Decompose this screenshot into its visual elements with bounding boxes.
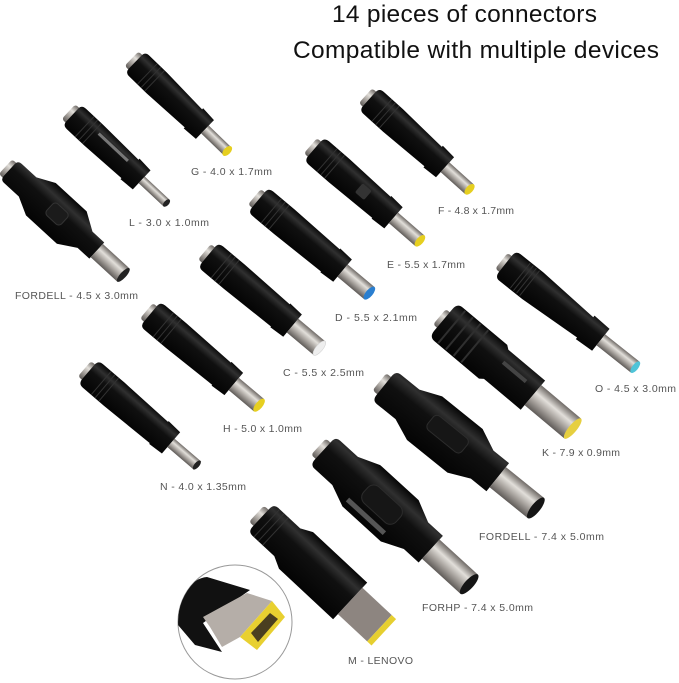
label M: M - LENOVO bbox=[348, 655, 413, 667]
connector M Lenovo bbox=[239, 495, 413, 667]
title line 1: 14 pieces of connectors bbox=[332, 1, 597, 28]
label FORHP: FORHP - 7.4 x 5.0mm bbox=[422, 602, 533, 614]
label O: O - 4.5 x 3.0mm bbox=[595, 383, 676, 395]
inset metal plug bbox=[203, 593, 272, 647]
connector D bbox=[244, 184, 417, 324]
connector N bbox=[74, 357, 246, 493]
label C: C - 5.5 x 2.5mm bbox=[283, 367, 364, 379]
title line 2: Compatible with multiple devices bbox=[293, 37, 659, 64]
label FORDELL 7.4: FORDELL - 7.4 x 5.0mm bbox=[479, 531, 604, 543]
connector H bbox=[136, 298, 302, 435]
plug H bbox=[136, 298, 272, 420]
connector FORHP bbox=[300, 426, 533, 614]
label G: G - 4.0 x 1.7mm bbox=[191, 166, 272, 178]
plug E bbox=[300, 134, 433, 255]
connector C bbox=[194, 239, 364, 379]
plug N bbox=[74, 357, 209, 478]
connector FORDELL 7.4 bbox=[362, 360, 604, 543]
label K: K - 7.9 x 0.9mm bbox=[542, 447, 620, 459]
connector FORDELL 4.5 bbox=[0, 150, 140, 302]
inset black body bbox=[178, 577, 250, 652]
plug K bbox=[425, 300, 590, 448]
label E: E - 5.5 x 1.7mm bbox=[387, 259, 465, 271]
label D: D - 5.5 x 2.1mm bbox=[335, 312, 417, 324]
plug FORDELL 7.4 bbox=[362, 360, 557, 533]
inset yellow tip bbox=[240, 601, 285, 650]
inset tip hole bbox=[251, 613, 278, 642]
label FORDELL 4.5: FORDELL - 4.5 x 3.0mm bbox=[15, 290, 138, 302]
connector E bbox=[300, 134, 465, 271]
label H: H - 5.0 x 1.0mm bbox=[223, 423, 302, 435]
connector O bbox=[491, 247, 676, 395]
plug G bbox=[121, 48, 240, 164]
plug FORDELL 4.5 bbox=[0, 150, 140, 293]
plug M bbox=[239, 495, 401, 651]
plug F bbox=[355, 85, 482, 203]
connector L bbox=[59, 101, 209, 229]
connector F bbox=[355, 85, 514, 217]
plug FORHP bbox=[300, 426, 491, 608]
plug L bbox=[59, 101, 178, 215]
connector G bbox=[121, 48, 272, 178]
plug O bbox=[491, 247, 648, 382]
connector K bbox=[425, 300, 620, 459]
label L: L - 3.0 x 1.0mm bbox=[129, 217, 209, 229]
label N: N - 4.0 x 1.35mm bbox=[160, 481, 246, 493]
inset: close-up of Lenovo tip bbox=[178, 565, 292, 679]
plug C bbox=[194, 239, 332, 363]
label F: F - 4.8 x 1.7mm bbox=[438, 205, 514, 217]
title bbox=[293, 1, 659, 64]
plug D bbox=[244, 184, 382, 308]
